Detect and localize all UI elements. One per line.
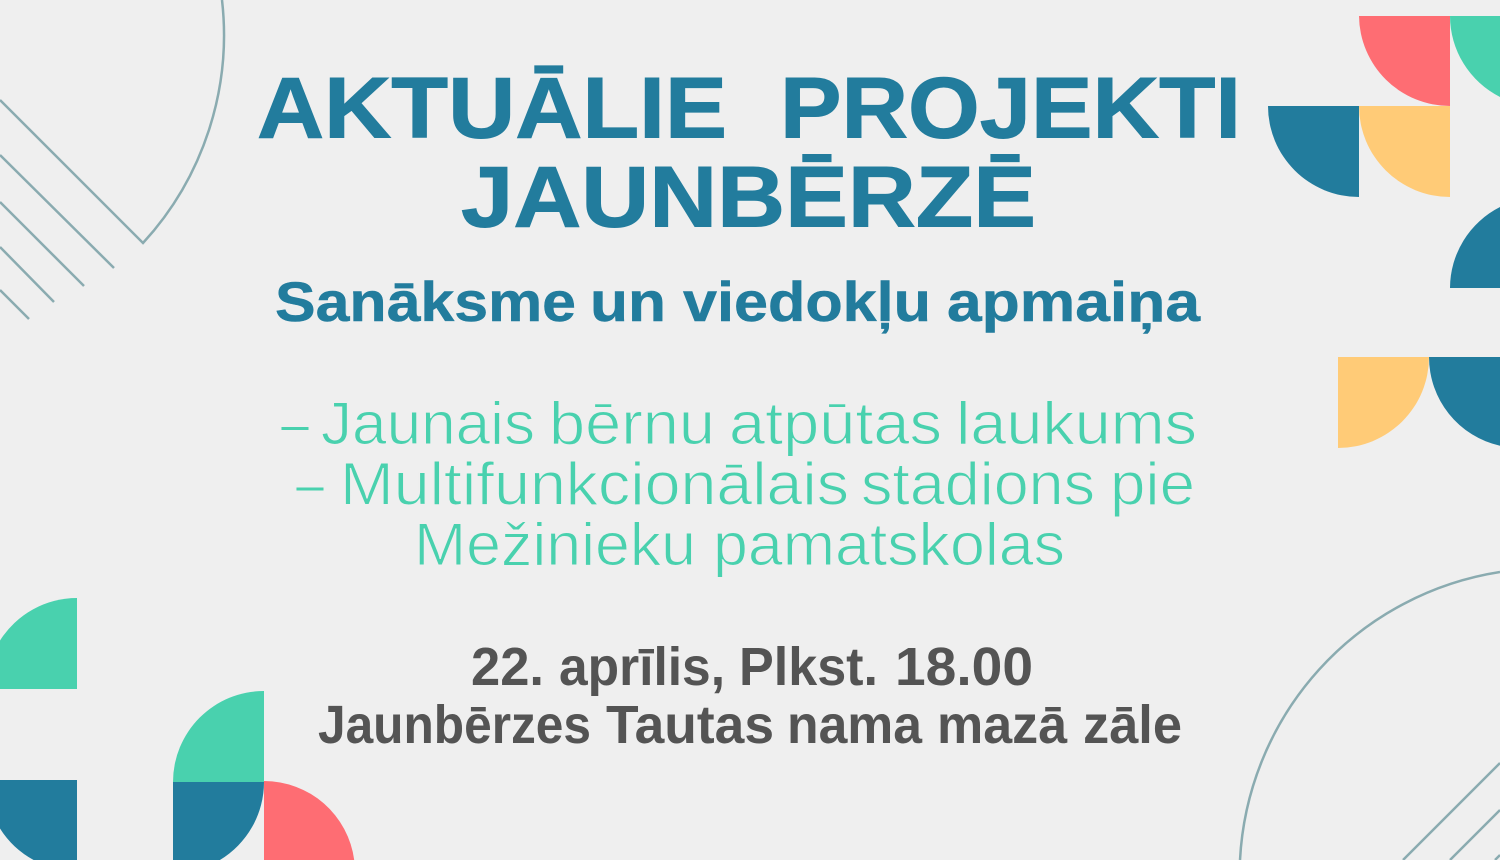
project list: atpūtas [729,390,942,457]
project list: Jaunais [321,390,535,457]
date and venue: aprīlis, [559,637,725,697]
project list: pamatskolas [713,511,1065,578]
date and venue: nama [787,695,923,755]
subtitle: apmaiņa [947,270,1201,334]
date and venue: Plkst. [739,637,878,697]
subtitle: un [590,270,666,333]
project list: stadions [861,450,1095,518]
icon group: top-right quarter circles [1268,16,1500,197]
title: AKTUĀLIE [257,60,727,156]
date and venue: zāle [1083,695,1182,755]
decoration: top-left outline circle and diagonal lines [0,0,224,319]
icon group: bottom-left quarter circles [0,598,354,860]
title [257,60,1241,246]
icon group: right-edge quarter circles [1338,207,1500,448]
date and venue [318,637,1182,755]
date and venue: Tautas [606,695,774,755]
project list: pie [1110,450,1195,518]
project list [281,390,1197,578]
subtitle: Sanāksme [275,270,576,333]
title: JAUNBĒRZĒ [461,150,1036,246]
project list: laukums [956,390,1197,457]
project list: – [281,390,310,457]
title: PROJEKTI [780,60,1241,156]
project list: Mežinieku [414,511,696,578]
project list: bērnu [549,390,715,457]
date and venue: 18.00 [895,637,1033,697]
project list: – [296,450,325,518]
date and venue: Jaunbērzes [318,695,591,755]
date and venue: mazā [937,695,1068,755]
decoration: bottom-right outline circle and diagonal lines [1240,572,1500,860]
date and venue: 22. [471,637,544,697]
project list: Multifunkcionālais [340,450,849,518]
subtitle: viedokļu [683,270,931,334]
